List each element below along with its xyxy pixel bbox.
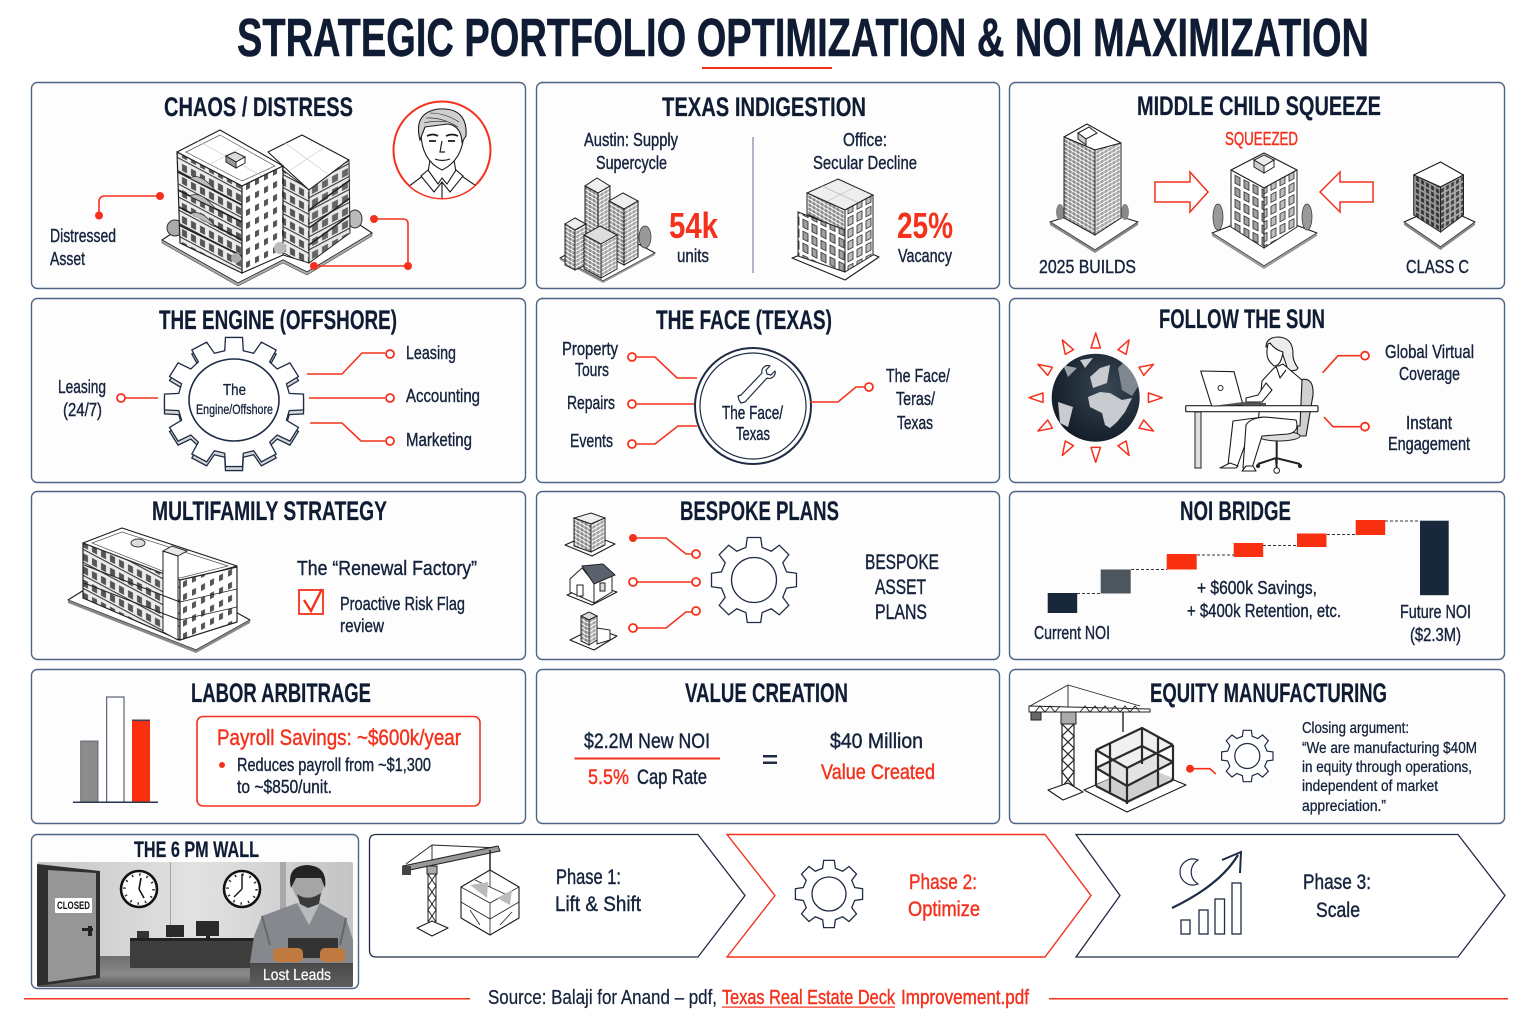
icon: equity gear [1222, 730, 1273, 782]
panel: equity manufacturing [1010, 670, 1504, 824]
heading: value creation: VALUE CREATION [685, 678, 848, 708]
panel: bespoke plans [536, 492, 1000, 660]
icon: growth chart with arrow [1172, 852, 1241, 934]
panel: texas indigestion [536, 82, 1000, 288]
labels: engine functions: Marketing [406, 430, 472, 450]
labels: engine functions [406, 343, 480, 450]
formula: noi over cap rate: $2.2M New NOI [584, 730, 710, 753]
text: proactive risk flag: review [340, 616, 385, 636]
equals sign [763, 755, 777, 764]
result: value created: $40 Million [830, 730, 923, 753]
icon: globe with sun rays [1029, 333, 1162, 462]
labels: face inputs: Repairs [567, 393, 615, 413]
stat: 54k units: units [677, 246, 709, 266]
callout: payroll savings: to ~$850/unit. [237, 777, 332, 797]
label: future noi [1400, 602, 1471, 645]
icon: crane with module [402, 845, 519, 936]
panel: value creation [536, 670, 1000, 824]
label: face output: Texas [897, 413, 933, 433]
labels: coverage: Engagement [1388, 434, 1470, 454]
icon: face circle with wrench: Texas [736, 424, 770, 444]
label: bespoke asset plans [865, 551, 939, 624]
label: leasing 24/7: Leasing [58, 377, 106, 397]
stat: 25% vacancy: 25% [897, 205, 953, 246]
icon: engine gear [164, 337, 304, 471]
heading: labor arbitrage: LABOR ARBITRAGE [191, 678, 371, 708]
label: austin: Austin: Supply [584, 130, 678, 150]
labels: coverage: Global Virtual [1385, 342, 1474, 362]
connectors: bespoke [629, 534, 700, 632]
labels: face inputs: Events [570, 431, 613, 451]
labels: engine functions: Accounting [406, 386, 480, 406]
icon: red checkbox [299, 589, 323, 614]
label: austin: Supercycle [596, 153, 667, 173]
labels: face inputs [562, 339, 618, 451]
formula: noi over cap rate: Cap Rate [637, 766, 707, 789]
text: savings breakdown: + $400k Retention, etc. [1187, 601, 1341, 621]
label: face output: The Face/ [886, 366, 950, 386]
panel: the engine [32, 298, 526, 482]
footer: source line: Source: Balaji for Anand – pdf, [488, 987, 717, 1009]
heading: the face: THE FACE (TEXAS) [656, 305, 832, 335]
panel: multifamily strategy [32, 492, 526, 660]
label: bespoke asset plans: BESPOKE [865, 551, 939, 574]
label: 2025 builds: 2025 BUILDS [1039, 257, 1136, 277]
text: closing argument [1302, 720, 1477, 815]
illustration: city cluster [560, 178, 655, 283]
label: distressed asset [50, 226, 116, 269]
icon: engine gear: The [223, 382, 246, 399]
formula: noi over cap rate: 5.5% [588, 766, 629, 789]
panel: the 6 pm wall [32, 834, 358, 988]
label: future noi: ($2.3M) [1410, 625, 1461, 645]
illustration: middle building [1212, 153, 1317, 269]
photo: closed office scene: CLOSED [57, 900, 90, 912]
label: face output: Teras/ [896, 389, 935, 409]
text: phase 1: Lift & Shift [555, 893, 641, 916]
heading: follow the sun: FOLLOW THE SUN [1159, 304, 1325, 334]
illustration: distressed buildings [162, 130, 372, 286]
labels: face inputs: Tours [575, 360, 609, 380]
label: class c: CLASS C [1406, 257, 1469, 277]
label: squeezed: SQUEEZED [1225, 129, 1298, 149]
labels: face inputs: Property [562, 339, 618, 359]
panel: chaos / distress [32, 82, 526, 288]
text: proactive risk flag [340, 594, 465, 636]
chevron: phase 2 [727, 834, 1091, 957]
connectors: face inputs [628, 353, 697, 448]
panel: noi bridge [1010, 492, 1504, 660]
heading: the engine: THE ENGINE (OFFSHORE) [159, 305, 397, 335]
footer: source line: Improvement.pdf [901, 987, 1029, 1009]
label: bespoke asset plans: PLANS [875, 601, 927, 624]
text: phase 3: Phase 3: [1303, 871, 1371, 894]
label: face output [886, 366, 950, 433]
text: savings breakdown [1187, 578, 1341, 621]
heading: texas indigestion: TEXAS INDIGESTION [662, 92, 866, 122]
icon: face circle with wrench [695, 348, 811, 464]
stat: 25% vacancy: Vacancy [898, 246, 952, 266]
icon: office tower [565, 513, 615, 556]
text: closing argument: Closing argument: [1302, 720, 1409, 737]
labels: coverage: Coverage [1399, 364, 1460, 384]
connectors: follow the sun [1323, 352, 1369, 431]
label: bespoke asset plans: ASSET [875, 576, 926, 599]
stat: 54k units [669, 205, 719, 266]
illustration: class c building [1404, 162, 1475, 250]
label: office [813, 130, 917, 173]
illustration: crane and steel frame [1029, 685, 1186, 812]
connector: building callout [310, 215, 412, 270]
label: current noi: Current NOI [1034, 623, 1110, 643]
icon: portrait in red circle [394, 102, 490, 205]
label: distressed asset: Distressed [50, 226, 116, 246]
labels: coverage [1385, 342, 1474, 454]
illustration: multifamily building [68, 528, 250, 653]
panel: the face [536, 298, 1000, 482]
connectors: engine outputs [307, 350, 394, 445]
footer: source line: Texas Real Estate Deck [722, 987, 896, 1009]
icon: bespoke gear [712, 538, 796, 622]
connector: face output [810, 383, 873, 402]
text: proactive risk flag: Proactive Risk Flag [340, 594, 465, 614]
caption: lost leads: Lost Leads [263, 967, 331, 984]
heading: chaos: CHAOS / DISTRESS [164, 92, 353, 122]
chevron: phase 3 [1076, 834, 1505, 957]
text: phase 1: Phase 1: [556, 866, 621, 889]
labels: engine functions: Leasing [406, 343, 456, 363]
footer: source line [24, 987, 1508, 1009]
text: phase 3: Scale [1316, 899, 1360, 922]
text: closing argument: appreciation.” [1302, 798, 1386, 815]
heading: multifamily strategy: MULTIFAMILY STRATEGY [152, 496, 387, 526]
label: austin [584, 130, 678, 173]
result: value created: Value Created [821, 761, 935, 784]
text: savings breakdown: + $600k Savings, [1197, 578, 1317, 598]
heading: bespoke plans: BESPOKE PLANS [680, 496, 839, 526]
heading: noi bridge: NOI BRIDGE [1180, 496, 1291, 526]
icon: small tower [570, 612, 617, 650]
icon: phase 2 gear [795, 860, 863, 928]
panel: follow the sun [1010, 298, 1504, 482]
icon: engine gear: Engine/Offshore [196, 401, 273, 417]
chart: payroll bars [73, 697, 158, 803]
label: leasing 24/7 [58, 377, 106, 420]
text: closing argument: “We are manufacturing $40M [1302, 740, 1477, 757]
chart: waterfall bridge [1048, 520, 1449, 613]
labels: coverage: Instant [1406, 413, 1452, 433]
icon: house [567, 564, 617, 605]
stat: 54k units: 54k [669, 205, 719, 246]
callout: payroll savings: Reduces payroll from ~$1,300 [237, 755, 431, 775]
icon: face circle with wrench: The Face/ [722, 403, 783, 423]
illustration: office building [792, 179, 879, 280]
label: office: Secular Decline [813, 153, 917, 173]
label: distressed asset: Asset [50, 249, 85, 269]
connector: distressed to building [95, 192, 164, 220]
formula: noi over cap rate [574, 730, 720, 789]
text: phase 1 [555, 866, 641, 916]
heading: equity manufacturing: EQUITY MANUFACTURING [1150, 678, 1387, 708]
illustration: woman at desk [1186, 337, 1318, 473]
text: phase 3 [1303, 871, 1371, 922]
result: value created [821, 730, 935, 784]
label: future noi: Future NOI [1400, 602, 1471, 622]
heading: 6 pm wall: THE 6 PM WALL [134, 837, 259, 862]
connector: frame to gear [1186, 765, 1216, 774]
arrow: left squeeze [1155, 172, 1208, 212]
title underline [702, 67, 832, 69]
text: phase 2: Optimize [908, 898, 980, 921]
text: phase 2 [908, 871, 980, 921]
chevron: phase 1 [370, 834, 745, 957]
callout: payroll savings [197, 716, 480, 806]
text: phase 2: Phase 2: [909, 871, 977, 894]
label: leasing 24/7: (24/7) [63, 400, 102, 420]
connector: leasing to gear [117, 394, 158, 402]
text: closing argument: in equity through operations, [1302, 759, 1472, 776]
label: renewal factory: The “Renewal Factory” [297, 558, 477, 580]
arrow: right squeeze [1320, 172, 1373, 212]
text: closing argument: independent of market [1302, 778, 1438, 795]
heading: middle child squeeze: MIDDLE CHILD SQUEEZE [1137, 91, 1381, 121]
panel: labor arbitrage [32, 670, 526, 824]
illustration: 2025 tower [1050, 124, 1138, 253]
label: office: Office: [843, 130, 887, 150]
panel: middle child squeeze [1010, 82, 1504, 288]
callout: payroll savings: Payroll Savings: ~$600k/year [217, 725, 461, 750]
stat: 25% vacancy [897, 205, 953, 266]
photo: closed office scene [37, 862, 353, 987]
